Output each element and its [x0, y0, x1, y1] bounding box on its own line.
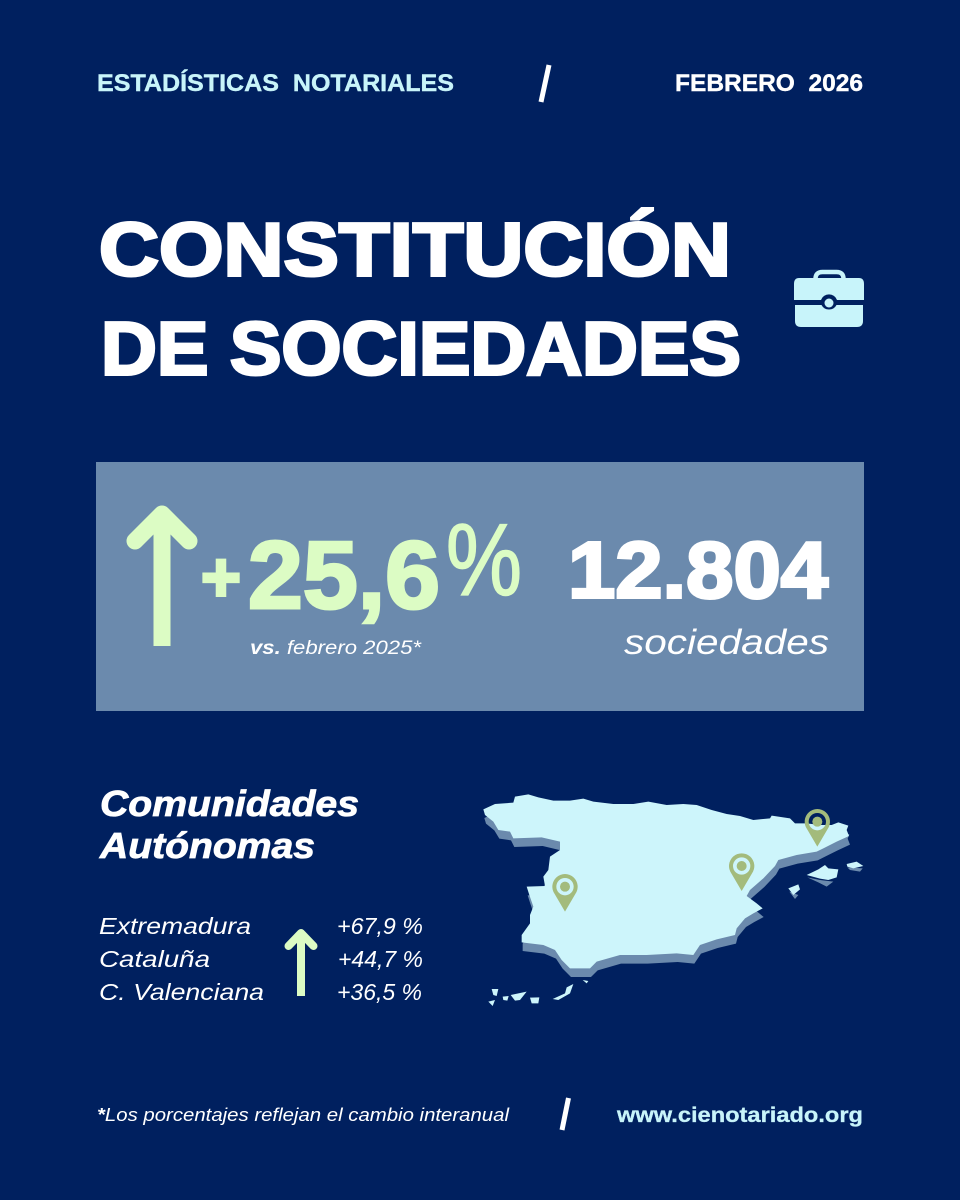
- header: [97, 65, 863, 102]
- regional heading: [99, 783, 359, 866]
- percent sign: %: [446, 503, 522, 617]
- regional heading: Autónomas: [99, 825, 315, 866]
- regional figures: Cataluña: [99, 946, 210, 972]
- header date: FEBRERO 2026: [675, 70, 863, 97]
- regional figures: +44,7 %: [338, 946, 423, 972]
- total companies: 12.804: [568, 526, 829, 614]
- regional figures: Extremadura: [99, 913, 251, 939]
- title: [99, 208, 741, 390]
- pin: Cataluña: [805, 809, 830, 847]
- icon: large up arrow: [135, 514, 189, 646]
- Canary islands: [488, 980, 588, 1006]
- map mainland: [483, 794, 849, 968]
- regional heading: Comunidades: [100, 783, 359, 824]
- pin: Extremadura: [552, 874, 578, 912]
- Balearic islands: [788, 862, 863, 899]
- header slash: [541, 65, 549, 102]
- regional figures: +36,5 %: [337, 979, 422, 1005]
- regional figures: [99, 913, 423, 1005]
- map shadow: [484, 803, 850, 977]
- pin: Valencia: [729, 853, 754, 891]
- comparison note: vs. febrero 2025*: [250, 638, 422, 659]
- footnote: *Los porcentajes reflejan el cambio interanual: [97, 1105, 510, 1125]
- icon: small up arrow: [288, 933, 314, 996]
- footer slash: [562, 1098, 568, 1130]
- panel: headline figures: [96, 462, 864, 711]
- map of Spain: [483, 794, 863, 1006]
- regional figures: C. Valenciana: [99, 979, 264, 1005]
- percentage change: +: [201, 538, 241, 616]
- header label: ESTADÍSTICAS NOTARIALES: [97, 69, 454, 97]
- map pins: [552, 809, 830, 912]
- footer: [97, 1098, 863, 1130]
- icon: briefcase: [794, 272, 864, 327]
- percentage change: 25,6: [248, 522, 440, 629]
- website: www.cienotariado.org: [616, 1104, 863, 1127]
- companies label: sociedades: [624, 623, 829, 662]
- title: DE SOCIEDADES: [101, 306, 741, 390]
- regional figures: +67,9 %: [337, 913, 423, 939]
- title: CONSTITUCIÓN: [99, 208, 731, 292]
